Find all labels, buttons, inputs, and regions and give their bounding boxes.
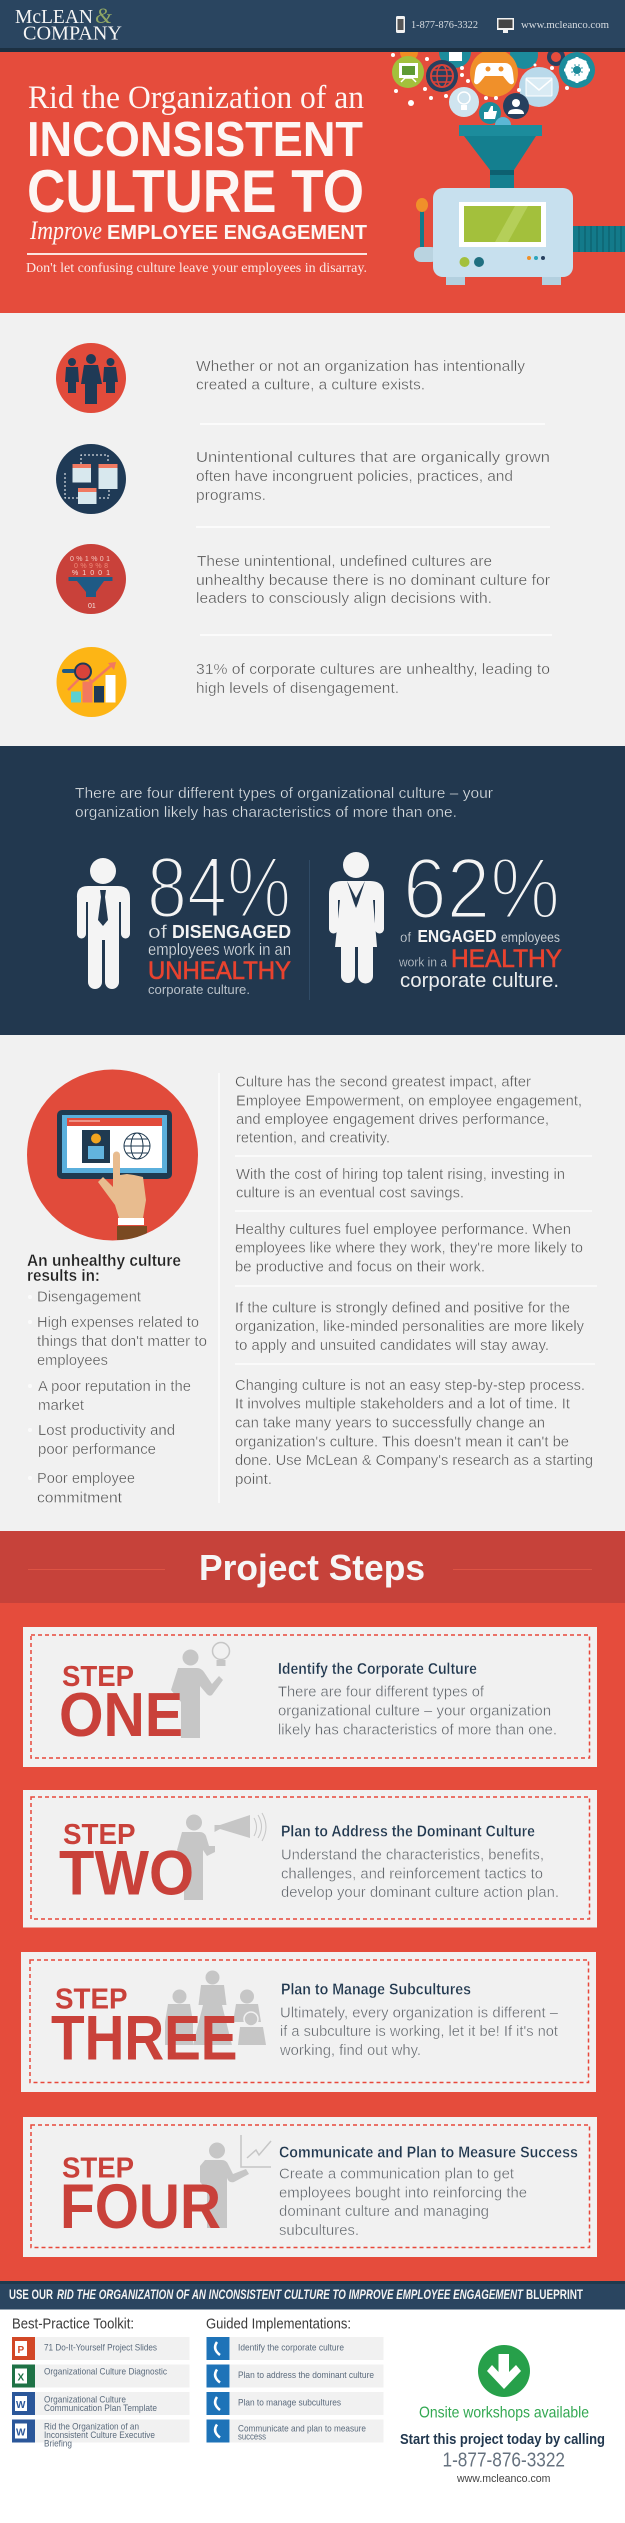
onsite workshops: Onsite workshops available bbox=[419, 2404, 589, 2422]
text: incongruent policies: often have incongruent policies, practices, and bbox=[196, 468, 513, 485]
card: step four bbox=[23, 2117, 597, 2257]
text: cost savings bbox=[236, 1166, 565, 1202]
text: changing culture: done. Use McLean & Company's research as a starting bbox=[235, 1452, 593, 1469]
intro text bbox=[75, 785, 493, 821]
toolkit items: Briefing bbox=[44, 2438, 72, 2450]
icon: phone bbox=[396, 16, 405, 33]
list of results: poor performance bbox=[38, 1441, 156, 1458]
icon: data funnel: 01 bbox=[88, 603, 96, 610]
website: www.mcleanco.com bbox=[521, 20, 609, 31]
text: incongruent policies: programs. bbox=[196, 487, 266, 504]
icon: data funnel bbox=[56, 544, 126, 614]
phone number: 1-877-876-3322 bbox=[411, 20, 478, 31]
step description: organizational culture – your organization bbox=[278, 1702, 551, 1720]
logo: McLEAN bbox=[15, 6, 93, 28]
stat: 84 percent: of bbox=[148, 922, 168, 942]
heading: unhealthy culture results: results in: bbox=[27, 1267, 100, 1285]
text: cost savings: With the cost of hiring top talent rising, investing in bbox=[236, 1166, 565, 1183]
step description: Understand the characteristics, benefits, bbox=[281, 1846, 544, 1864]
icon: excel bbox=[12, 2364, 35, 2388]
step description: Communicate and Plan to Measure Success bbox=[279, 2144, 578, 2162]
panel: guided implementations bbox=[206, 2316, 384, 2442]
text: culture exists: created a culture, a culture exists. bbox=[196, 376, 425, 394]
icon: woman bbox=[329, 852, 384, 984]
icon: chart and magnifier bbox=[56, 647, 126, 717]
icon: person with chart bbox=[200, 2135, 271, 2228]
icon: word bbox=[12, 2420, 35, 2442]
implementation items: Plan to manage subcultures bbox=[238, 2398, 341, 2408]
panel: introductory statements bbox=[0, 313, 625, 746]
stat: 62 percent: 62% bbox=[403, 841, 560, 937]
step description: There are four different types of bbox=[278, 1684, 485, 1700]
text: performance: employees like where they work, they're more likely to bbox=[235, 1240, 583, 1256]
step description: employees bought into reinforcing the bbox=[279, 2184, 527, 2202]
text: performance: be productive and focus on their work. bbox=[235, 1258, 485, 1276]
step description: Create a communication plan to get bbox=[279, 2166, 515, 2182]
step description: challenges, and reinforcement tactics to bbox=[281, 1866, 543, 1882]
stat: 62 percent bbox=[398, 841, 562, 992]
hero title: EMPLOYEE ENGAGEMENT bbox=[107, 221, 367, 244]
icon: word bbox=[12, 2392, 35, 2415]
stat: 84 percent bbox=[147, 840, 291, 997]
intro text: There are four different types of organizational culture – your bbox=[75, 785, 493, 802]
list of results: employees bbox=[37, 1352, 108, 1369]
hero subtitle: Don't let confusing culture leave your employees in disarray. bbox=[26, 260, 367, 275]
website: www.mcleanco.com bbox=[456, 2473, 550, 2485]
panel: blueprint banner: BLUEPRINT bbox=[526, 2286, 583, 2302]
stat: 62 percent: ENGAGED bbox=[418, 926, 496, 946]
step label: STEP bbox=[63, 1819, 136, 1851]
icon: data funnel: 0%9%8 bbox=[74, 563, 108, 570]
list of results bbox=[28, 1288, 207, 1506]
step description: Ultimately, every organization is different – bbox=[280, 2004, 559, 2022]
text: candidates: to apply and unsuited candidates will stay away. bbox=[235, 1337, 549, 1354]
step description: Identify the Corporate Culture bbox=[278, 1661, 477, 1678]
stat: 62 percent: HEALTHY bbox=[451, 945, 562, 973]
step description: likely has characteristics of more than one. bbox=[278, 1722, 557, 1738]
implementation items: Plan to address the dominant culture bbox=[238, 2370, 374, 2381]
machine bbox=[414, 188, 625, 285]
list of results: Poor employee bbox=[37, 1470, 135, 1487]
step label: ONE bbox=[59, 1681, 183, 1750]
step label bbox=[51, 1984, 238, 2074]
text: culture impact: and employee engagement drives performance, bbox=[236, 1111, 549, 1128]
implementation items: success bbox=[238, 2432, 266, 2442]
intro text: organization likely has characteristics of more than one. bbox=[75, 804, 457, 821]
illustration: icon bubbles and funnel machine bbox=[391, 36, 625, 285]
stat: 62 percent: work in a bbox=[398, 956, 447, 970]
hero title bbox=[27, 80, 367, 245]
text: incongruent policies: Unintentional cultures that are organically grown bbox=[196, 449, 550, 466]
icon: people bbox=[56, 343, 126, 413]
icon: word: W bbox=[16, 2428, 26, 2438]
toolkit items: Organizational Culture Diagnostic bbox=[44, 2366, 167, 2378]
text: unhealthy cultures: unhealthy because there is no dominant culture for bbox=[196, 572, 550, 589]
step description: Plan to Address the Dominant Culture bbox=[281, 1824, 535, 1840]
panel: call to action bbox=[400, 2345, 605, 2485]
panel: best-practice toolkit bbox=[12, 2316, 190, 2450]
step description: develop your dominant culture action plan. bbox=[281, 1884, 559, 1901]
step label: THREE bbox=[51, 2004, 238, 2074]
list of results: Lost productivity and bbox=[38, 1422, 175, 1439]
icon bubbles bbox=[392, 36, 595, 133]
step label: STEP bbox=[62, 2152, 134, 2184]
list of results: market bbox=[38, 1397, 85, 1414]
step label: STEP bbox=[62, 1661, 134, 1693]
step description bbox=[278, 1661, 557, 1738]
icon: data funnel: %1001 bbox=[72, 570, 110, 577]
text: culture exists: Whether or not an organization has intentionally bbox=[196, 358, 526, 375]
step description: subcultures. bbox=[279, 2222, 359, 2239]
text: unhealthy cultures: leaders to consciously align decisions with. bbox=[196, 590, 492, 607]
text: changing culture: point. bbox=[235, 1471, 272, 1488]
implementation items bbox=[238, 2342, 374, 2442]
hero title: CULTURE TO bbox=[27, 158, 364, 225]
text: candidates: organization, like-minded personalities are more likely bbox=[235, 1318, 584, 1335]
logo bbox=[15, 3, 122, 44]
icon: tables bbox=[56, 444, 126, 514]
text: incongruent policies bbox=[196, 449, 550, 504]
icon: word: W bbox=[16, 2400, 26, 2411]
text: changing culture: organization's culture. This doesn't mean it can't be bbox=[235, 1434, 569, 1450]
icon: powerpoint: P bbox=[18, 2345, 24, 2356]
step description bbox=[279, 2144, 578, 2239]
toolkit items bbox=[44, 2342, 167, 2450]
text: 31 percent statistic bbox=[196, 661, 550, 697]
card: step one bbox=[23, 1627, 597, 1767]
stat: 62 percent: employees bbox=[501, 930, 560, 945]
panel: engagement statistics bbox=[0, 746, 625, 1035]
step description bbox=[279, 1982, 559, 2059]
text: performance bbox=[235, 1221, 583, 1276]
step description bbox=[281, 1824, 559, 1901]
text: culture impact: retention, and creativity. bbox=[236, 1130, 390, 1146]
icon: green download arrow bbox=[478, 2345, 530, 2397]
text: changing culture: Changing culture is not an easy step-by-step process. bbox=[235, 1377, 585, 1394]
step label: TWO bbox=[59, 1838, 194, 1908]
list of results: A poor reputation in the bbox=[38, 1378, 191, 1395]
text: culture impact: Employee Empowerment, on employee engagement, bbox=[236, 1092, 582, 1110]
implementations heading: Guided Implementations: bbox=[206, 2316, 351, 2332]
panel: top header bar bbox=[0, 0, 625, 52]
step description: if a subculture is working, let it be! If it's not bbox=[280, 2023, 559, 2040]
text: changing culture bbox=[235, 1377, 593, 1488]
toolkit items: Organizational Culture bbox=[44, 2394, 126, 2406]
text: culture impact bbox=[235, 1074, 582, 1146]
panel: project steps bbox=[0, 1531, 625, 2281]
step description: working, find out why. bbox=[279, 2042, 421, 2059]
panel: unhealthy culture details bbox=[0, 1035, 625, 1531]
text: culture exists bbox=[196, 358, 526, 394]
icon: person with lightbulb bbox=[171, 1642, 230, 1738]
phone number: 1-877-876-3322 bbox=[442, 2450, 565, 2472]
toolkit items: Rid the Organization of an bbox=[44, 2422, 139, 2432]
text: changing culture: It involves multiple stakeholders and a lot of time. It bbox=[235, 1396, 571, 1412]
step description: Plan to Manage Subcultures bbox=[281, 1982, 471, 1998]
icon: monitor bbox=[497, 18, 514, 33]
text: candidates: If the culture is strongly defined and positive for the bbox=[235, 1300, 570, 1316]
stat: 84 percent: 84% bbox=[147, 840, 291, 936]
panel: blueprint banner: USE OUR bbox=[9, 2286, 53, 2302]
stat: 84 percent: corporate culture. bbox=[148, 982, 250, 997]
text: changing culture: can take many years to successfully change an bbox=[235, 1414, 545, 1432]
implementation items: Identify the corporate culture bbox=[238, 2342, 344, 2354]
heading: unhealthy culture results: An unhealthy culture bbox=[27, 1252, 181, 1270]
hero title: INCONSISTENT bbox=[27, 113, 363, 167]
hero title: Rid the Organization of an bbox=[28, 80, 364, 116]
text: candidates bbox=[235, 1300, 584, 1354]
card: step two bbox=[23, 1790, 597, 1928]
list of results: commitment bbox=[37, 1490, 123, 1506]
card: step three bbox=[21, 1952, 596, 2092]
list of results: things that don't matter to bbox=[37, 1333, 207, 1350]
text: unhealthy cultures: These unintentional, undefined cultures are bbox=[197, 553, 492, 570]
icon: person with megaphone bbox=[177, 1813, 266, 1900]
panel: blueprint banner bbox=[0, 2281, 625, 2310]
icons: phone calls bbox=[206, 2337, 230, 2442]
icon: excel: X bbox=[18, 2372, 24, 2384]
logo: COMPANY bbox=[23, 22, 122, 44]
hero title: Improve bbox=[29, 216, 102, 245]
logo: & bbox=[95, 3, 113, 28]
icon: powerpoint bbox=[12, 2337, 35, 2360]
text: cost savings: culture is an eventual cost savings. bbox=[236, 1184, 464, 1202]
funnel bbox=[459, 125, 542, 188]
step label: STEP bbox=[55, 1984, 128, 2016]
text: culture impact: Culture has the second greatest impact, after bbox=[235, 1074, 531, 1090]
stat: 62 percent: corporate culture. bbox=[400, 969, 559, 992]
stat: 62 percent: of bbox=[400, 930, 411, 945]
list of results: High expenses related to bbox=[37, 1314, 199, 1331]
heading: unhealthy culture results bbox=[27, 1252, 181, 1285]
list of results: Disengagement bbox=[37, 1288, 142, 1306]
icon: man bbox=[77, 858, 130, 989]
stat: 84 percent: DISENGAGED bbox=[172, 921, 291, 942]
toolkit items: 71 Do-It-Yourself Project Slides bbox=[44, 2342, 157, 2354]
step label: FOUR bbox=[60, 2172, 221, 2242]
toolkit items: Communication Plan Template bbox=[44, 2403, 157, 2414]
implementation items: Communicate and plan to measure bbox=[238, 2424, 366, 2434]
text: unhealthy cultures bbox=[196, 553, 550, 607]
stat: 84 percent: employees work in an bbox=[148, 940, 291, 959]
text: 31 percent statistic: high levels of disengagement. bbox=[196, 680, 399, 697]
icon: group of people bbox=[165, 1970, 266, 2045]
panel: hero banner bbox=[0, 36, 625, 313]
toolkit items: Inconsistent Culture Executive bbox=[44, 2430, 155, 2441]
heading band: project steps bbox=[0, 1531, 625, 1603]
heading band: project steps: Project Steps bbox=[199, 1547, 425, 1588]
step description: dominant culture and managing bbox=[279, 2203, 489, 2220]
dividers bbox=[196, 423, 552, 636]
white particles bbox=[391, 53, 569, 106]
icon: data funnel: 0%1%01 bbox=[70, 556, 110, 563]
text: 31 percent statistic: 31% of corporate cultures are unhealthy, leading to bbox=[196, 661, 550, 678]
toolkit heading: Best-Practice Toolkit: bbox=[12, 2316, 134, 2332]
stat: 84 percent: UNHEALTHY bbox=[148, 957, 291, 985]
text: performance: Healthy cultures fuel employee performance. When bbox=[235, 1221, 571, 1238]
icon: tablet and hand bbox=[27, 1070, 198, 1240]
